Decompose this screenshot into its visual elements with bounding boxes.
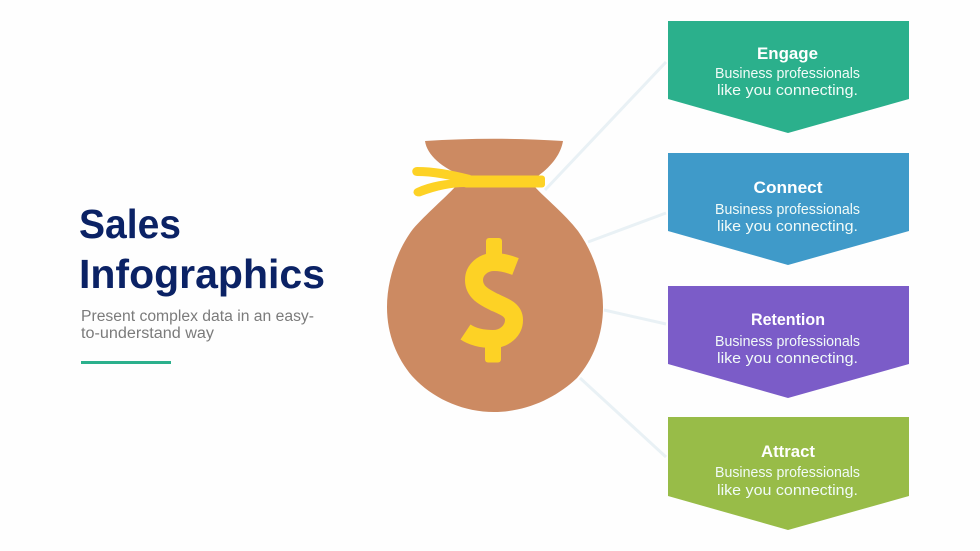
subtitle text (81, 308, 314, 342)
accent underline (81, 361, 171, 364)
panel: Connect: Business professionals (715, 202, 860, 218)
panel: Connect: Connect (754, 178, 823, 197)
panel: Retention: Retention (751, 310, 825, 329)
bag body (387, 187, 603, 412)
subtitle text: to-understand way (81, 325, 214, 342)
panel: Retention: Business professionals (715, 334, 860, 350)
subtitle text: Present complex data in an easy- (81, 308, 314, 325)
panel: Engage: Engage (757, 44, 818, 63)
panel: Connect (668, 153, 909, 265)
tie strings (413, 168, 470, 195)
dollar sign (466, 243, 516, 358)
panel: Attract: Attract (761, 442, 815, 461)
title: Sales (79, 201, 181, 247)
panel: Retention: like you connecting. (717, 351, 858, 367)
panel: Engage: like you connecting. (717, 83, 858, 99)
panel: Attract: like you connecting. (717, 483, 858, 499)
panel: Connect: like you connecting. (717, 219, 858, 235)
title: Infographics (79, 251, 325, 297)
tie band (463, 176, 545, 188)
panel: Engage (668, 21, 909, 133)
panel: Retention (668, 286, 909, 398)
title (79, 201, 325, 297)
panel: Attract (668, 417, 909, 530)
bag top (425, 139, 563, 188)
panel: Attract: Business professionals (715, 465, 860, 481)
icon: money bag (387, 139, 603, 412)
panel: Engage: Business professionals (715, 66, 860, 82)
